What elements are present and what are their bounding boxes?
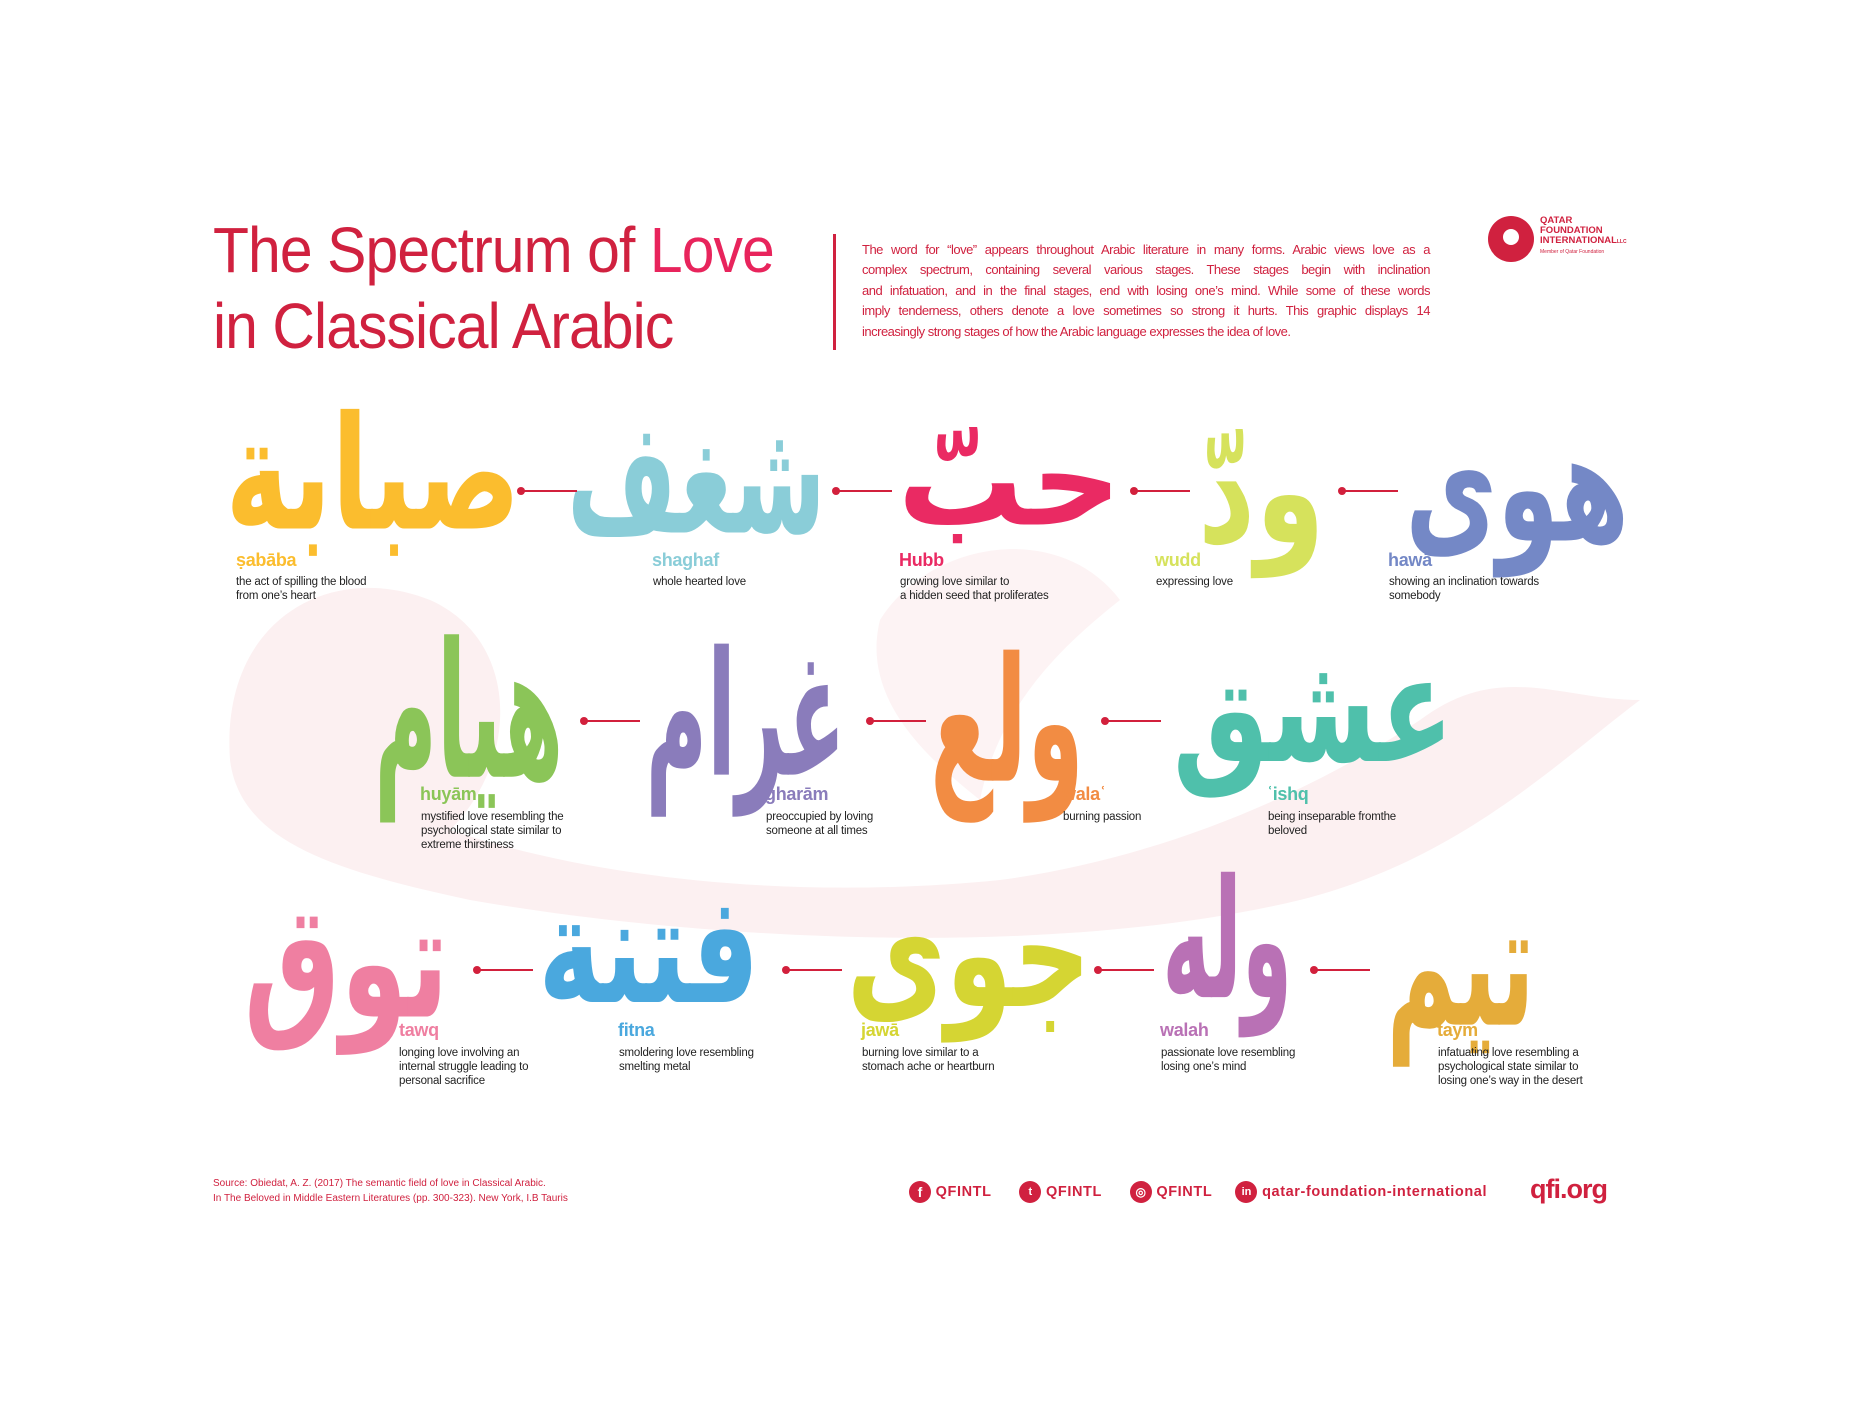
text: burning love similar to a — [862, 1047, 978, 1059]
text: whole hearted love — [653, 576, 746, 588]
social links: QFINTL QFINTL QFINTL qatar-foundation-international — [936, 1184, 1487, 1200]
label: fitna: fitna — [618, 1020, 654, 1040]
divider line — [833, 234, 836, 350]
word: shaghaf: شغف — [567, 388, 826, 570]
icon: Q logo — [1488, 216, 1534, 262]
logo: QATAR — [1540, 215, 1572, 226]
intro paragraph: increasingly strong stages of how the Arabic language expresses the idea of love. — [862, 324, 1291, 339]
word: huyam: هيام — [375, 604, 563, 821]
source note: In The Beloved in Middle Eastern Literatures (pp. 300-323). New York, I.B Tauris — [213, 1193, 568, 1204]
text: preoccupied by loving — [766, 811, 873, 823]
text: losing one’s way in the desert — [1438, 1075, 1583, 1087]
title — [213, 214, 774, 362]
icon: facebook: f — [918, 1184, 922, 1200]
text: stomach ache or heartburn — [862, 1061, 994, 1073]
text: growing love similar to — [900, 576, 1009, 588]
connector — [1094, 966, 1154, 974]
word: hubb: حبّ — [897, 408, 1122, 555]
word: taym: تيم — [1386, 866, 1535, 1066]
label: jawa: jawā — [861, 1020, 899, 1040]
word: jawa: جوى — [846, 868, 1091, 1042]
social links — [909, 1181, 1487, 1203]
label: ishq: ʿishq — [1267, 784, 1308, 804]
title: in Classical Arabic — [213, 290, 673, 362]
text: someone at all times — [766, 825, 867, 837]
intro paragraph: complex spectrum, containing several various stages. These stages begin with inclination — [862, 262, 1430, 277]
connector — [1310, 966, 1370, 974]
intro paragraph: imply tenderness, others denote a love sometimes so strong it hurts. This graphic displays 14 — [862, 303, 1430, 318]
word: fitna: فتنة — [538, 864, 759, 1038]
text: mystified love resembling the — [421, 811, 564, 823]
word: ishq: عشق — [1173, 622, 1454, 796]
word: gharam: غرام — [646, 616, 846, 816]
text: passionate love resembling — [1161, 1047, 1295, 1059]
label: tawq: tawq — [399, 1020, 439, 1040]
icon: twitter: t — [1029, 1186, 1032, 1198]
label: hawa: hawā — [1388, 550, 1432, 570]
intro paragraph: The word for “love” appears throughout Arabic literature in many forms. Arabic views love as a — [862, 242, 1430, 257]
word: wudd: ودّ — [1197, 407, 1325, 578]
connector — [580, 717, 640, 725]
source note — [213, 1178, 568, 1204]
text: expressing love — [1156, 576, 1233, 588]
logo — [1488, 215, 1627, 262]
text: psychological state similar to — [1438, 1061, 1578, 1073]
connector — [1338, 487, 1398, 495]
text: psychological state similar to — [421, 825, 561, 837]
word: tawq: توق — [244, 872, 449, 1054]
intro paragraph: and infatuation, and in the final stages, end with losing one’s mind. While some of these words — [862, 283, 1430, 298]
text: burning passion — [1063, 811, 1141, 823]
logo: FOUNDATION — [1540, 225, 1603, 236]
word: wala: ولع — [931, 622, 1084, 822]
text: longing love involving an — [399, 1047, 519, 1059]
icon: instagram: ◎ — [1135, 1185, 1146, 1199]
text: the act of spilling the blood — [236, 576, 366, 588]
label: wala: walaʿ — [1062, 784, 1106, 804]
text: losing one’s mind — [1161, 1061, 1246, 1073]
logo: INTERNATIONALLLC — [1540, 235, 1627, 246]
source note: Source: Obiedat, A. Z. (2017) The semantic field of love in Classical Arabic. — [213, 1178, 546, 1189]
icon: twitter — [1019, 1181, 1041, 1203]
label: shaghaf: shaghaf — [652, 550, 719, 570]
title: The Spectrum of Love — [213, 214, 774, 286]
connector — [517, 487, 577, 495]
connector — [1130, 487, 1190, 495]
text: personal sacrifice — [399, 1075, 485, 1087]
intro paragraph — [862, 242, 1430, 339]
connector — [832, 487, 892, 495]
text: extreme thirstiness — [421, 839, 514, 851]
text: smoldering love resembling — [619, 1047, 754, 1059]
text: showing an inclination towards — [1389, 576, 1539, 588]
website: qfi.org — [1530, 1174, 1607, 1204]
connector — [473, 966, 533, 974]
icon: facebook — [909, 1181, 931, 1203]
connector — [782, 966, 842, 974]
icon: linkedin: in — [1242, 1186, 1251, 1198]
word: hawa: هوى — [1405, 399, 1629, 577]
logo: Member of Qatar Foundation — [1540, 249, 1604, 255]
text: beloved — [1268, 825, 1307, 837]
word: walah: وله — [1162, 845, 1292, 1037]
label: wudd: wudd — [1155, 550, 1201, 570]
text: a hidden seed that proliferates — [900, 590, 1049, 602]
label: sababa: ṣabāba — [236, 550, 296, 570]
word: sababa: صبابة — [225, 384, 521, 566]
label: hubb: Hubb — [899, 550, 944, 570]
text: from one’s heart — [236, 590, 316, 602]
connector — [1101, 717, 1161, 725]
label: huyam: huyām — [420, 784, 477, 804]
label: walah: walah — [1160, 1020, 1209, 1040]
text: somebody — [1389, 590, 1440, 602]
icon: linkedin — [1235, 1181, 1257, 1203]
text: being inseparable fromthe — [1268, 811, 1396, 823]
label: gharam: gharām — [765, 784, 828, 804]
connector — [866, 717, 926, 725]
label: taym: taym — [1437, 1020, 1478, 1040]
text: internal struggle leading to — [399, 1061, 528, 1073]
text: infatuating love resembling a — [1438, 1047, 1579, 1059]
text: smelting metal — [619, 1061, 690, 1073]
icon: instagram — [1130, 1181, 1152, 1203]
